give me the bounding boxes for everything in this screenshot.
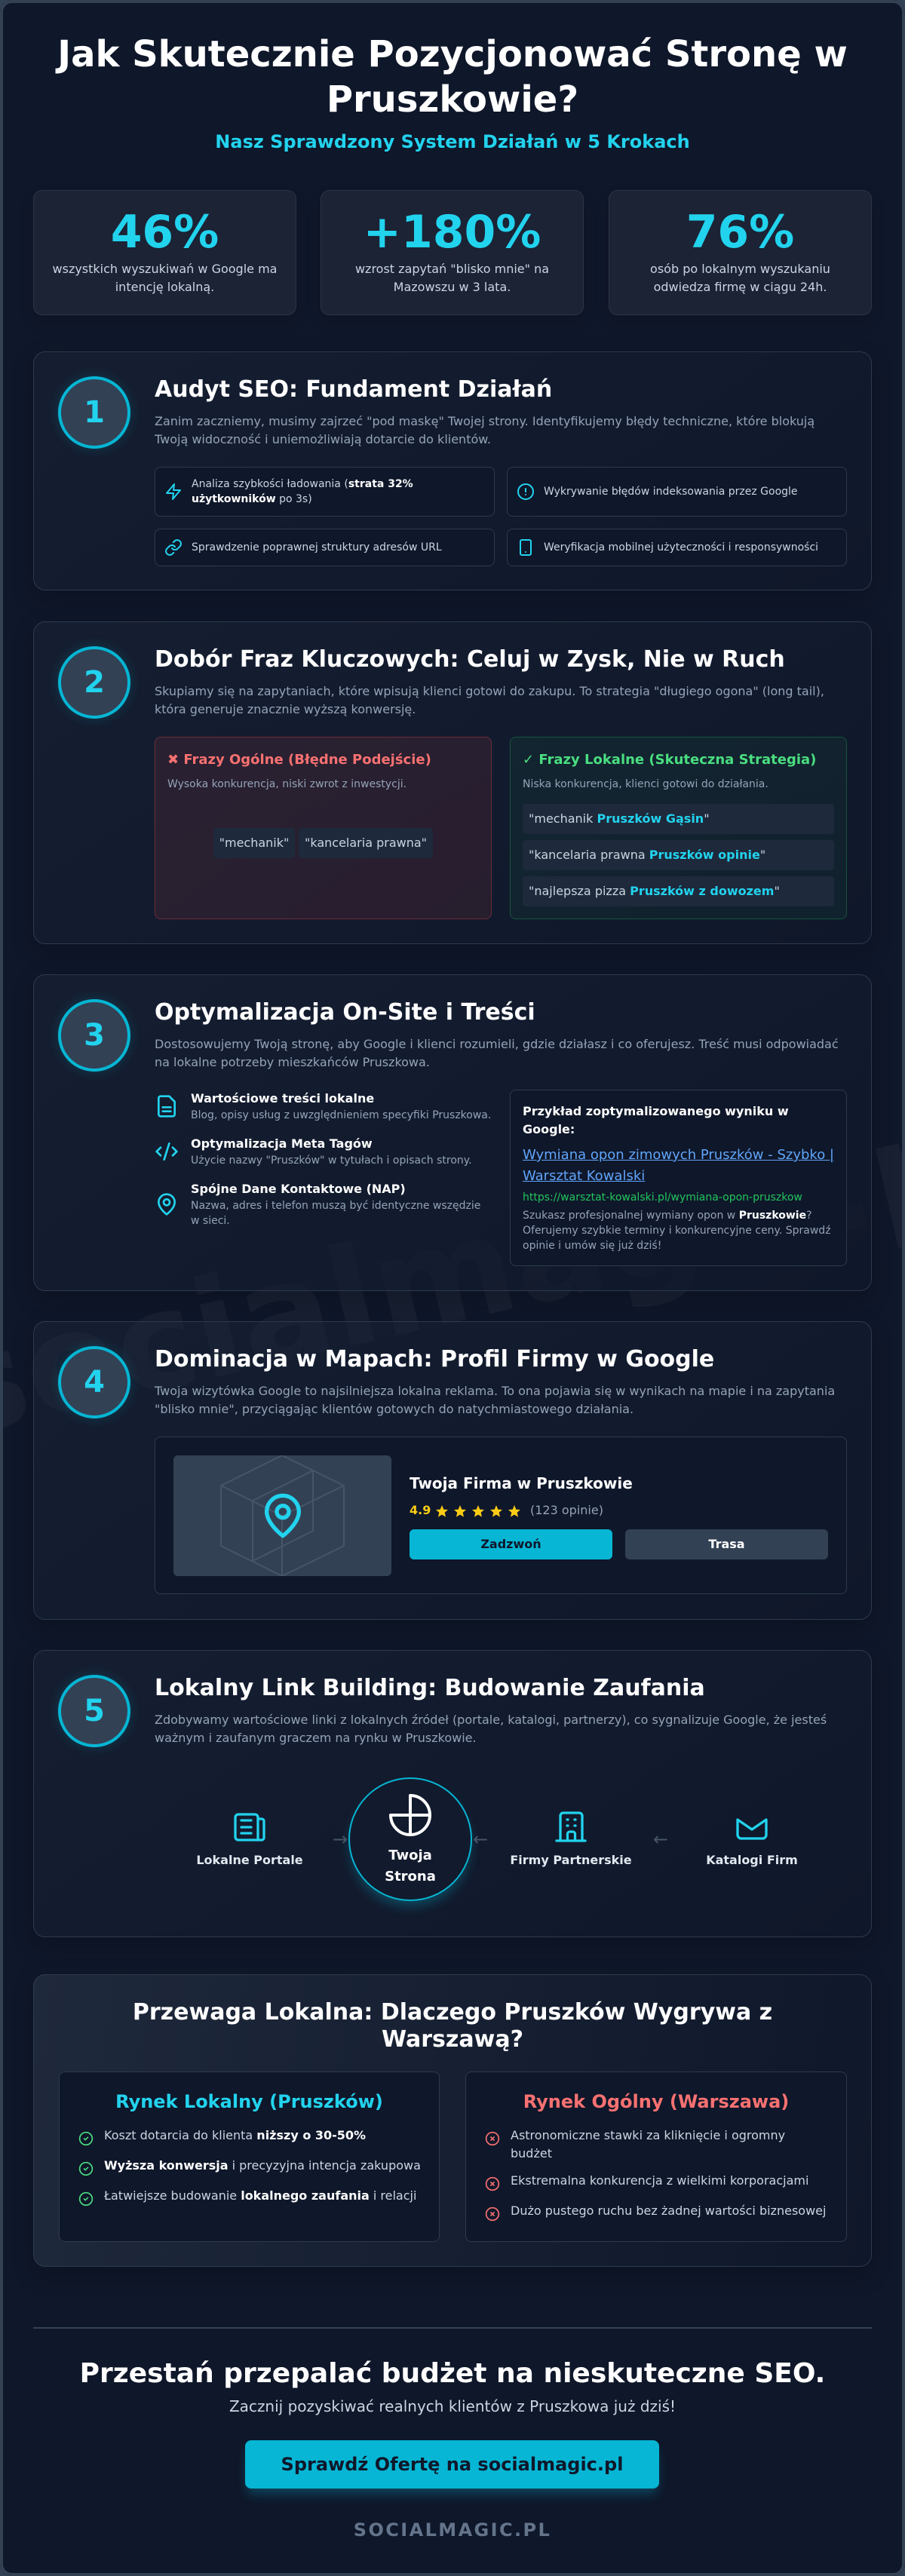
chip: kancelaria prawna	[299, 828, 433, 858]
cross item 1	[465, 2072, 467, 2073]
icon: alert circle	[517, 483, 534, 500]
local market heading: Rynek Lokalny (Pruszków)	[115, 2091, 383, 2112]
CTA button	[245, 2440, 659, 2489]
panel: step 3	[33, 974, 872, 1292]
item text: Ekstremalna konkurencja z wielkimi korporacjami	[511, 2173, 808, 2188]
step 2 number	[58, 646, 130, 719]
icon: building	[555, 1811, 587, 1842]
stat label: Mazowszu w 3 lata.	[394, 280, 511, 294]
arrow left: ←	[473, 1829, 488, 1850]
cross item 2	[465, 2072, 467, 2073]
text: URL structure: Sprawdzenie poprawnej struktury adresów URL	[192, 541, 442, 554]
step 5 number: 5	[84, 1694, 105, 1728]
item text: Łatwiejsze budowanie lokalnego zaufania i relacji	[104, 2188, 416, 2203]
step 3 description: na lokalne potrzeby mieszkańców Pruszkowa.	[155, 1055, 430, 1069]
icon: smartphone	[520, 539, 532, 556]
icon: newspaper	[234, 1813, 265, 1842]
example snippet	[523, 1210, 831, 1252]
step 3 card	[33, 974, 872, 1291]
step 3 description: Dostosowujemy Twoją stronę, aby Google i klienci rozumieli, gdzie działasz i co oferujesz. Treść musi odpowiadać	[155, 1037, 839, 1051]
chip: mechanik Pruszków Gąsin: "mechanik Pruszków Gąsin"	[529, 811, 710, 826]
example link: Wymiana opon zimowych Pruszków - Szybko |	[523, 1147, 834, 1163]
stat label: wzrost zapytań "blisko mnie" na	[355, 262, 549, 276]
feature: local content: Blog, opisy usług z uwzględnieniem specyfiki Pruszkowa.	[191, 1109, 491, 1121]
audit item: page speed	[155, 467, 495, 517]
step 2 card	[33, 621, 872, 944]
step 1 description: Zanim zaczniemy, musimy zajrzeć "pod maskę" Twojej strony. Identyfikujemy błędy techniczne, które blokują	[155, 414, 814, 428]
stat label: odwiedza firmę w ciągu 24h.	[654, 280, 827, 294]
icon: check	[78, 2161, 94, 2176]
icon: check	[78, 2131, 94, 2146]
example heading: Przykład zoptymalizowanego wyniku w	[523, 1104, 789, 1118]
stat card: 76%	[609, 190, 872, 315]
text: mobile usability: Weryfikacja mobilnej użyteczności i responsywności	[544, 541, 818, 554]
generic phrases heading: ✖ Frazy Ogólne (Błędne Podejście)	[167, 752, 431, 768]
central circle: your site	[348, 1777, 472, 1901]
audit item: URL structure	[155, 529, 495, 566]
chip: mechanik Pruszków Gąsin	[523, 804, 834, 834]
text: page speed: użytkowników po 3s)	[192, 493, 312, 505]
step 3 description	[155, 1037, 839, 1069]
CTA subheading: Zacznij pozyskiwać realnych klientów z Pruszkowa już dziś!	[229, 2397, 676, 2415]
step 2 description: Skupiamy się na zapytaniach, które wpisują klienci gotowi do zakupu. To strategia "długiego ogona" (long tail),	[155, 684, 824, 698]
feature: NAP: Nazwa, adres i telefon muszą być identyczne wszędzie	[191, 1200, 480, 1212]
comparison heading: Warszawą?	[382, 2026, 523, 2053]
stat label	[53, 262, 277, 294]
arrow left: ←	[653, 1829, 668, 1850]
rating value: 4.9	[410, 1503, 431, 1517]
feature: local content	[191, 1091, 491, 1121]
comparison heading	[133, 1999, 772, 2053]
button: call: Zadzwoń	[480, 1537, 541, 1551]
item text: budżet	[511, 2146, 552, 2160]
title	[56, 33, 848, 121]
example snippet: opinie i umów się już dziś!	[523, 1240, 661, 1252]
step 4 description	[154, 1384, 835, 1416]
example heading: Google:	[523, 1122, 575, 1136]
icon: lightning	[166, 483, 181, 500]
footer brand: SOCIALMAGIC.PL	[354, 2519, 551, 2541]
step 1 number	[58, 376, 130, 449]
step 3 heading: Optymalizacja On-Site i Treści	[155, 999, 535, 1026]
stat label: wszystkich wyszukiwań w Google ma	[53, 262, 277, 276]
feature: meta tags: Optymalizacja Meta Tagów	[191, 1136, 373, 1151]
step 2 description: która generuje znacznie wyższą konwersję.	[155, 702, 416, 716]
icon: link	[165, 539, 182, 556]
step 3 number: 3	[84, 1018, 105, 1053]
item text	[511, 2127, 785, 2163]
map wireframe	[220, 1455, 345, 1576]
subtitle: Nasz Sprawdzony System Działań w 5 Krokach	[215, 131, 690, 152]
icon: cross	[485, 2176, 500, 2191]
step 2 description	[155, 684, 824, 716]
icon: check	[78, 2191, 94, 2206]
button: route	[625, 1529, 828, 1559]
chip: kancelaria prawna Pruszków opinie: "kancelaria prawna Pruszków opinie"	[529, 848, 765, 862]
icon: mail	[736, 1818, 768, 1840]
stat card: 46%	[33, 190, 296, 315]
source label: partner companies: Firmy Partnerskie	[510, 1853, 632, 1867]
check item 2	[59, 2072, 60, 2073]
step 5 heading: Lokalny Link Building: Budowanie Zaufania	[155, 1675, 705, 1701]
text: page speed	[192, 478, 413, 505]
generic phrases note: Wysoka konkurencja, niski zwrot z inwestycji.	[167, 778, 406, 790]
step 5 card	[33, 1650, 872, 1937]
panel: local phrases	[510, 737, 847, 919]
check item 1	[78, 2128, 366, 2146]
feature: NAP: Spójne Dane Kontaktowe (NAP)	[191, 1182, 406, 1196]
local phrases heading: ✓ Frazy Lokalne (Skuteczna Strategia)	[523, 752, 816, 768]
icon: code	[155, 1142, 178, 1161]
step 4 number	[58, 1346, 130, 1418]
panel: Google result example	[510, 1090, 847, 1266]
audit item: indexing errors	[507, 467, 847, 517]
step 5 description	[155, 1713, 827, 1745]
central label: Strona	[385, 1869, 436, 1884]
chip: najlepsza pizza Pruszków z dowozem	[523, 876, 834, 906]
chip: najlepsza pizza Pruszków z dowozem: "najlepsza pizza Pruszków z dowozem"	[529, 884, 780, 898]
panel: generic phrases	[155, 737, 492, 919]
icon: cross	[485, 2206, 500, 2222]
title: Jak Skutecznie Pozycjonować Stronę w	[57, 33, 848, 75]
arrow right: →	[333, 1829, 348, 1850]
step 4 heading: Dominacja w Mapach: Profil Firmy w Google	[155, 1346, 714, 1372]
stat card: +180%	[321, 190, 584, 315]
review count: (123 opinie)	[530, 1503, 603, 1517]
stat number: +180%	[364, 206, 541, 259]
audit item: mobile usability	[507, 529, 847, 566]
icon: map pin	[158, 1193, 176, 1216]
panel: business profile	[155, 1437, 847, 1594]
icon: map pin	[265, 1493, 301, 1538]
step 5 description: ważnym i zaufanym graczem na rynku w Pruszkowie.	[155, 1731, 477, 1745]
panel: step 4	[33, 1321, 872, 1620]
item text: Dużo pustego ruchu bez żadnej wartości biznesowej	[511, 2203, 826, 2218]
CTA button: Sprawdź Ofertę na socialmagic.pl	[281, 2454, 623, 2475]
step 4 card	[33, 1321, 872, 1620]
panel: local market	[59, 2072, 440, 2242]
general market heading: Rynek Ogólny (Warszawa)	[523, 2091, 789, 2112]
button: route: Trasa	[708, 1537, 745, 1551]
feature: NAP	[191, 1182, 480, 1227]
icon: globe	[389, 1794, 431, 1836]
panel: step 1	[33, 351, 872, 590]
feature: NAP: w sieci.	[191, 1215, 230, 1227]
panel: general market	[465, 2072, 847, 2242]
comparison card	[33, 1974, 872, 2267]
check item 3	[59, 2072, 60, 2073]
central label	[385, 1848, 436, 1884]
item text: Koszt dotarcia do klienta niższy o 30-50%	[104, 2128, 366, 2142]
feature: meta tags: Użycie nazwy "Pruszków" w tytułach i opisach strony.	[191, 1155, 472, 1167]
button: call	[410, 1529, 612, 1559]
map image	[173, 1455, 391, 1576]
stat label: osób po lokalnym wyszukaniu	[650, 262, 830, 276]
stat label	[355, 262, 549, 294]
example snippet: Oferujemy szybkie terminy i konkurencyjne ceny. Sprawdź	[523, 1225, 831, 1237]
chip: mechanik: "mechanik"	[219, 836, 289, 850]
text: page speed: Analiza szybkości ładowania (strata 32%	[192, 478, 413, 490]
text: indexing errors: Wykrywanie błędów indeksowania przez Google	[544, 486, 798, 498]
central label: Twoja	[388, 1848, 432, 1863]
chip: mechanik	[213, 828, 295, 858]
title: Pruszkowie?	[327, 78, 578, 121]
stat number: 76%	[686, 206, 794, 259]
feature: local content: Wartościowe treści lokalne	[191, 1091, 374, 1106]
step 4 description: "blisko mnie", przyciągając klientów gotowych do natychmiastowego działania.	[155, 1402, 634, 1416]
source label: directories: Katalogi Firm	[706, 1853, 798, 1867]
example URL: https://warsztat-kowalski.pl/wymiana-opon-pruszkow	[523, 1191, 802, 1204]
comparison heading: Przewaga Lokalna: Dlaczego Pruszków Wygrywa z	[133, 1999, 772, 2026]
panel: step 2	[33, 621, 872, 944]
local phrases note: Niska konkurencja, klienci gotowi do działania.	[523, 778, 768, 790]
rating stars	[436, 1505, 520, 1517]
step 3 number	[58, 999, 130, 1072]
example snippet: Szukasz profesjonalnej wymiany opon w Pruszkowie?	[523, 1210, 812, 1222]
step 1 number: 1	[84, 395, 105, 430]
step 4 description: Twoja wizytówka Google to najsilniejsza lokalna reklama. To ona pojawia się w wynikach na mapie i na zapytania	[155, 1384, 835, 1398]
example heading	[523, 1104, 789, 1136]
step 5 number	[58, 1675, 130, 1747]
panel: local advantage	[33, 1974, 872, 2267]
step 1 description	[154, 414, 814, 446]
feature: meta tags	[191, 1136, 472, 1167]
step 4 number: 4	[84, 1365, 105, 1400]
stat number: 46%	[111, 206, 219, 259]
step 1 heading: Audyt SEO: Fundament Działań	[155, 376, 552, 403]
icon: cross	[485, 2131, 500, 2146]
step 2 number: 2	[84, 665, 105, 700]
example link: Warsztat Kowalski	[523, 1168, 645, 1184]
step 1 description: Twoją widoczność i uniemożliwiają dotarcie do klientów.	[155, 432, 491, 446]
step 1 card	[33, 351, 872, 590]
CTA heading: Przestań przepalać budżet na nieskuteczne SEO.	[80, 2358, 825, 2389]
panel: step 5	[33, 1650, 872, 1937]
item text: Wyższa konwersja i precyzyjna intencja zakupowa	[104, 2158, 421, 2173]
stat label	[650, 262, 830, 294]
step 2 heading: Dobór Fraz Kluczowych: Celuj w Zysk, Nie w Ruch	[155, 646, 785, 673]
chip: kancelaria prawna: "kancelaria prawna"	[305, 836, 427, 850]
example link	[523, 1147, 834, 1184]
icon: file	[158, 1095, 176, 1118]
business name: Twoja Firma w Pruszkowie	[410, 1474, 633, 1492]
chip: kancelaria prawna Pruszków opinie	[523, 840, 834, 870]
step 5 description: Zdobywamy wartościowe linki z lokalnych źródeł (portale, katalogi, partnerzy), co sygnalizuje Google, że jesteś	[155, 1713, 827, 1727]
item text: Astronomiczne stawki za kliknięcie i ogromny	[511, 2128, 785, 2142]
stat label: intencję lokalną.	[115, 280, 214, 294]
cross item 3	[465, 2072, 467, 2073]
source label: local portals: Lokalne Portale	[196, 1853, 303, 1867]
